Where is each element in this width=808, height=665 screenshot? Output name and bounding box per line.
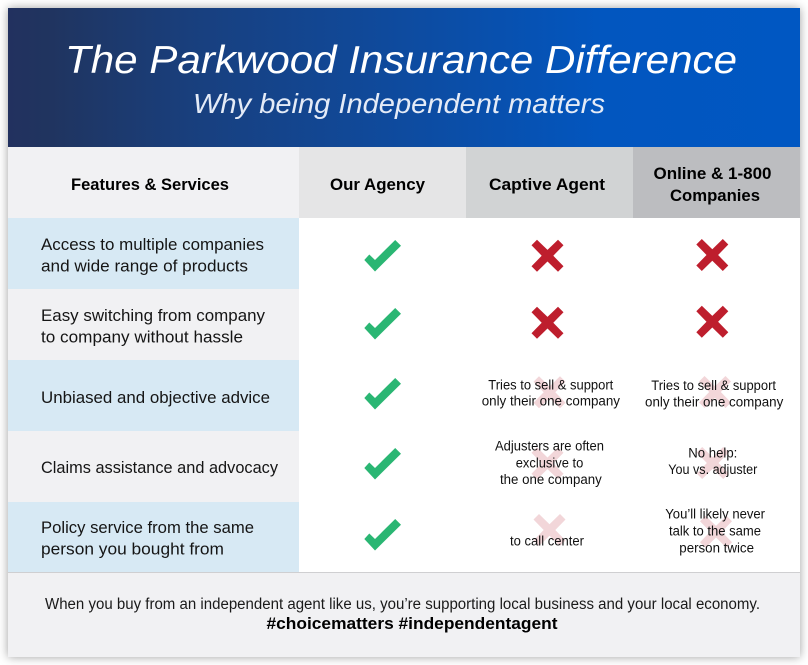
online: no help text: No help: — [688, 445, 737, 460]
captive: sell text: only their one company — [482, 394, 620, 408]
online: never same person text: person twice — [679, 541, 754, 556]
faded crosses — [532, 376, 732, 548]
header: online and 1-800 companies: Companies — [670, 186, 760, 205]
online: never same person text — [665, 507, 765, 556]
subtitle: Why being Independent matters — [193, 88, 605, 119]
title: The Parkwood Insurance Difference — [65, 39, 737, 82]
header: our agency: Our Agency — [330, 175, 426, 194]
column headers — [8, 147, 800, 218]
captive: adjusters text: exclusive to — [516, 455, 583, 470]
check marks: our agency — [364, 240, 401, 550]
header: online and 1-800 companies: Online & 1-800 — [654, 164, 772, 183]
online: never same person text: You’ll likely never — [665, 507, 765, 522]
red crosses — [532, 239, 728, 339]
footer statement: When you buy from an independent agent like us, you’re supporting local business and your local economy. — [45, 596, 760, 613]
feature: access: and wide range of products — [41, 258, 248, 276]
header: captive agent: Captive Agent — [489, 175, 605, 194]
captive: adjusters text — [495, 439, 604, 487]
feature rows — [8, 218, 299, 572]
feature: switching — [41, 307, 266, 346]
footer — [8, 572, 800, 657]
online: sell text: only their one company — [645, 394, 784, 410]
feature: access — [41, 236, 264, 276]
online: sell text — [645, 378, 784, 410]
captive: sell text — [482, 377, 620, 408]
online: no help text — [668, 445, 758, 477]
feature: switching: Easy switching from company — [41, 307, 266, 325]
feature: claims: Claims assistance and advocacy — [41, 459, 279, 477]
feature: access: Access to multiple companies — [41, 236, 264, 254]
header: online and 1-800 companies — [654, 164, 772, 205]
hashtags: #choicematters #independentagent — [266, 615, 558, 633]
feature: switching: to company without hassle — [41, 328, 243, 346]
feature: policy service: Policy service from the same — [41, 519, 254, 537]
captive: adjusters text: the one company — [500, 472, 602, 487]
captive: sell text: Tries to sell & support — [488, 377, 614, 392]
online: no help text: You vs. adjuster — [668, 462, 758, 477]
title banner — [8, 8, 800, 147]
feature: policy service: person you bought from — [41, 540, 224, 558]
feature: unbiased: Unbiased and objective advice — [41, 389, 270, 407]
online: sell text: Tries to sell & support — [651, 378, 776, 393]
feature: policy service — [41, 519, 254, 558]
online: never same person text: talk to the same — [669, 524, 761, 539]
header: features: Features & Services — [71, 175, 229, 194]
captive: adjusters text: Adjusters are often — [495, 439, 604, 454]
captive: call center text: to call center — [510, 533, 584, 548]
